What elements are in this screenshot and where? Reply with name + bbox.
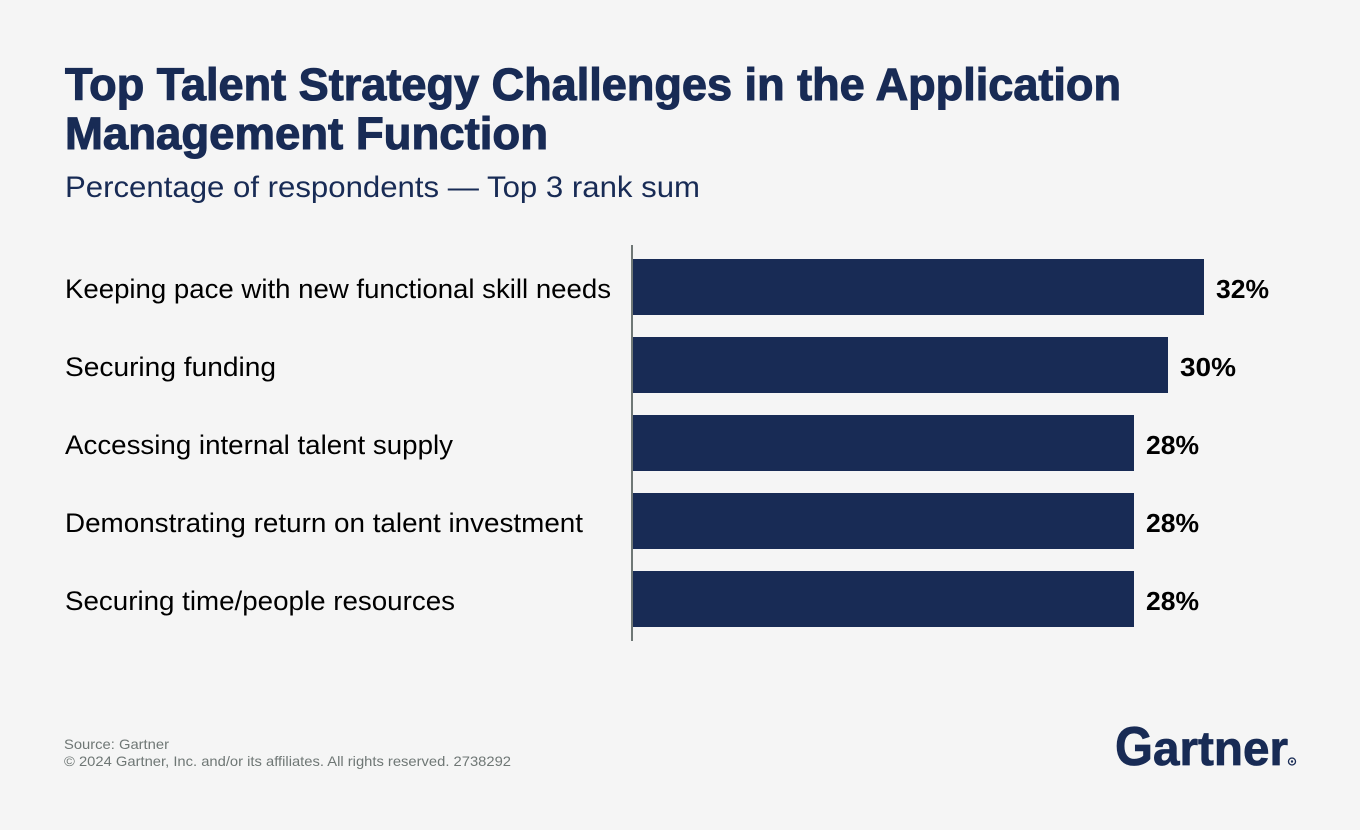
source note	[64, 736, 511, 769]
category labels: Securing funding	[65, 352, 276, 382]
value labels: 30%	[1180, 352, 1236, 382]
category labels: Demonstrating return on talent investment	[65, 508, 584, 538]
bar chart	[65, 245, 1269, 641]
category labels: Accessing internal talent supply	[65, 430, 454, 460]
subtitle: Percentage of respondents — Top 3 rank sum	[65, 171, 700, 204]
title: Management Function	[65, 108, 548, 159]
logo: Gartner: G	[1115, 715, 1153, 777]
title: Top Talent Strategy Challenges in the Application	[65, 59, 1121, 110]
value labels	[1146, 274, 1269, 616]
category labels: Securing time/people resources	[65, 586, 455, 616]
title	[65, 59, 1121, 159]
bars	[633, 259, 1204, 627]
value labels: 28%	[1146, 586, 1199, 616]
axis line	[631, 245, 633, 641]
logo: Gartner: artner	[1153, 723, 1288, 776]
logo: Gartner	[1115, 715, 1296, 777]
source note: © 2024 Gartner, Inc. and/or its affiliates. All rights reserved. 2738292	[64, 753, 511, 769]
category labels: Keeping pace with new functional skill needs	[65, 274, 611, 304]
value labels: 28%	[1146, 430, 1199, 460]
value labels: 28%	[1146, 508, 1199, 538]
category labels	[65, 274, 611, 616]
source note: Source: Gartner	[64, 736, 169, 752]
value labels: 32%	[1216, 274, 1269, 304]
